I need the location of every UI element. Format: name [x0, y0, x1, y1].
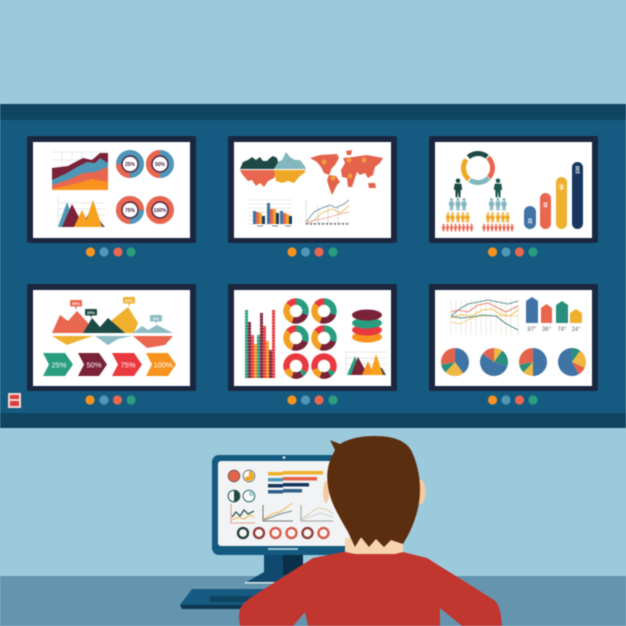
- stacked discs: [352, 310, 382, 342]
- mirrored area chart: [240, 152, 306, 187]
- ears: [323, 480, 426, 504]
- person seen from behind: [239, 436, 502, 626]
- desk: [0, 576, 626, 626]
- keyboard: [180, 589, 300, 609]
- progress arrow 50%: 50%: [86, 360, 102, 370]
- neck: [345, 538, 403, 554]
- progress arrow 100%: 100%: [153, 360, 173, 370]
- stacked area chart: [52, 152, 108, 190]
- donut 25%: [119, 153, 141, 175]
- value tags: 5%: [153, 316, 159, 321]
- value tags: 50%: [72, 301, 80, 306]
- right people pyramid: [482, 178, 514, 231]
- house bars: 24°: [571, 327, 581, 333]
- value tags: [70, 297, 162, 324]
- stopwatch dials: [228, 470, 255, 502]
- monitor 3 indicator dots: [488, 247, 538, 257]
- monitor: stacked area and donut charts: [27, 136, 196, 243]
- icon: pdf badge: [8, 393, 21, 408]
- grouped bar chart: [248, 200, 292, 226]
- house bars: 87°: [527, 327, 537, 333]
- progress arrow 25%: 25%: [51, 360, 67, 370]
- desktop computer: [212, 455, 362, 584]
- progress arrow 50%: [78, 353, 107, 376]
- ring chart: [457, 147, 499, 189]
- house bars: 36°: [542, 327, 552, 333]
- monitor: dotted bars and donuts: [228, 284, 397, 391]
- donut 50%: [149, 153, 171, 175]
- shirt: [239, 552, 502, 626]
- donut 50%: 50%: [155, 162, 166, 168]
- donut 75%: 75%: [125, 208, 136, 214]
- pill bar chart: 100: [576, 166, 582, 174]
- pie 2: [484, 352, 504, 372]
- horizontal bars: [268, 471, 323, 494]
- progress arrow 75%: [112, 353, 142, 376]
- monitor: mountains and progress arrows: [27, 284, 196, 391]
- mini line charts: [231, 503, 333, 523]
- monitor: world map and charts: [228, 136, 397, 243]
- pill bar chart: 60: [560, 184, 566, 190]
- world map: [310, 150, 383, 195]
- pie 1: [445, 352, 465, 372]
- house bars: 74°: [557, 327, 567, 333]
- monitor: line chart, houses and pies: [429, 284, 598, 391]
- pie 4: [562, 352, 582, 372]
- left people pyramid: [442, 178, 473, 231]
- donut 25%: 25%: [125, 162, 136, 168]
- donut 100%: [149, 199, 171, 221]
- value tags: 20%: [87, 310, 95, 315]
- mini ring row: [238, 528, 328, 538]
- monitor 5 indicator dots: [287, 395, 338, 405]
- display wall panel: [0, 104, 626, 428]
- donut 100%: 100%: [154, 208, 167, 214]
- monitor 1 indicator dots: [86, 247, 136, 257]
- monitor 6 indicator dots: [488, 395, 538, 405]
- house bars: [526, 297, 582, 333]
- mountain chart: [58, 197, 105, 227]
- pill bar chart: [524, 162, 583, 229]
- multi-line chart: [451, 299, 518, 335]
- monitor: people demographics and pill bars: [429, 136, 598, 243]
- hair: [327, 436, 420, 547]
- mirrored mountain chart: [52, 307, 173, 348]
- progress arrow 100%: [146, 353, 176, 376]
- donut grid: [283, 298, 337, 379]
- line chart: [306, 200, 350, 224]
- progress arrow 75%: 75%: [120, 360, 136, 370]
- dotted column chart: [245, 310, 275, 378]
- donut 75%: [119, 199, 141, 221]
- mountain chart: [346, 352, 387, 375]
- progress arrow 25%: [43, 353, 73, 376]
- pill bar chart: 40: [544, 202, 550, 208]
- pie 3: [523, 352, 543, 372]
- pill bar chart: 20: [528, 218, 534, 224]
- value tags: 60%: [125, 298, 133, 303]
- monitor 4 indicator dots: [85, 395, 136, 405]
- monitor 2 indicator dots: [287, 247, 338, 257]
